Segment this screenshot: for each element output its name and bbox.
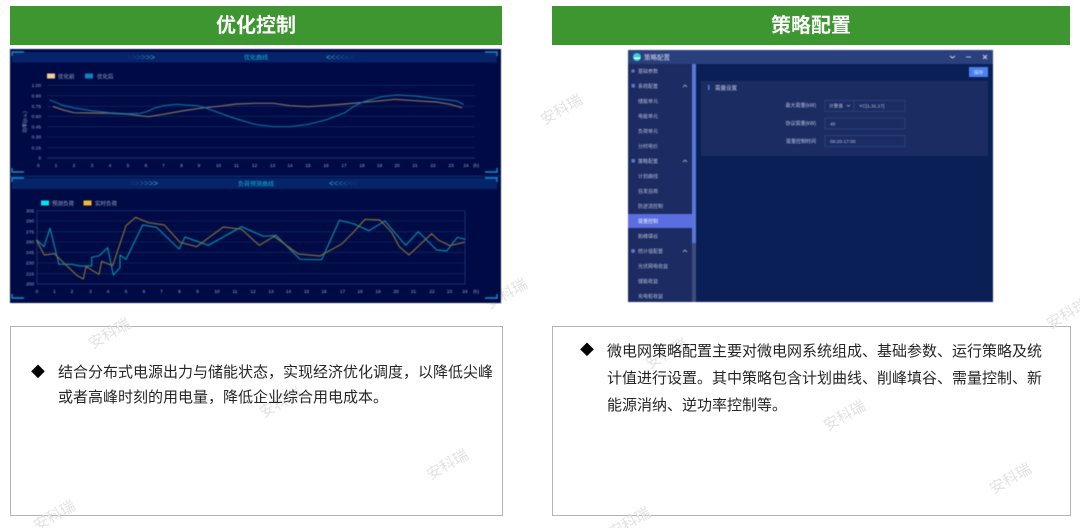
watermarks: 安科瑞 [424, 446, 471, 484]
chart: 负荷预测曲线: 13 [268, 289, 274, 295]
watermarks: 安科瑞 [86, 315, 133, 353]
sidebar menu: 充电桩收益 [638, 293, 663, 300]
chart: 负荷预测曲线: 23 [447, 289, 452, 295]
demand settings form: 协议需量(kW) [785, 120, 816, 127]
chart: 优化曲线: 优化前 [58, 72, 75, 80]
chart: 负荷预测曲线: 1 [53, 289, 56, 295]
text block: right description [607, 343, 1042, 414]
heading: 策略配置: 策略配置 [771, 15, 851, 37]
demand settings form: 需量控制时间 [786, 138, 816, 145]
text block: left description: 结合分布式电源出力与储能状态，实现经济优化调度，以降低尖峰 [58, 364, 493, 381]
chart: 负荷预测曲线: 16 [321, 289, 327, 295]
chart: 优化曲线: >>>>>> [127, 53, 155, 62]
demand settings form: 计算值 [829, 102, 843, 110]
chart: 负荷预测曲线: 20 [393, 289, 399, 295]
chart: 优化曲线: 1.00 [32, 83, 41, 89]
chart: 负荷预测曲线: 7 [160, 289, 163, 295]
text block: right description: 能源消纳、逆功率控制等。 [607, 397, 787, 414]
chart: 优化曲线: 18 [359, 163, 365, 169]
chart: 优化曲线: 0.15 [32, 145, 41, 151]
chart: 负荷预测曲线: (h) [473, 289, 479, 295]
bullet icon: right: ◆ [580, 342, 594, 358]
sidebar menu: 策略配置 [638, 158, 658, 165]
demand settings form: 40 [830, 122, 836, 128]
chart: 优化曲线: 22 [430, 163, 436, 169]
sidebar menu: 储能单元 [638, 98, 658, 105]
chart: 负荷预测曲线: 15 [304, 289, 309, 295]
chart: 优化曲线: 0.90 [32, 93, 41, 99]
save button [969, 67, 988, 77]
panel: left description box [10, 326, 503, 516]
chart: 优化曲线: 0.75 [32, 104, 41, 110]
title bar: 策略配置 [644, 52, 670, 62]
bullet icon: left: ◆ [31, 364, 45, 380]
chart: 优化曲线: 0.60 [32, 114, 41, 120]
sidebar menu: 防逆流控制 [638, 203, 663, 210]
title bar [628, 50, 993, 64]
chart: 优化曲线: 14 [287, 163, 293, 169]
chart: 负荷预测曲线: 215 [26, 271, 34, 277]
chart: 负荷预测曲线: 17 [340, 289, 345, 295]
chart: 优化曲线: 16 [323, 163, 329, 169]
chart: 优化曲线: 10 [216, 163, 221, 169]
chart: 优化曲线: 优化后 [97, 72, 114, 80]
watermarks: 安科瑞 [821, 397, 868, 435]
chart: 优化曲线: 20 [394, 163, 400, 169]
chart: 负荷预测曲线: 275 [26, 229, 34, 235]
watermarks: 安科瑞 [483, 275, 530, 313]
sidebar menu: 削峰填谷 [638, 233, 658, 240]
text block: right description: 计值进行设置。其中策略包含计划曲线、削峰填谷、需量控制、新 [607, 370, 1042, 387]
chart: 优化曲线: 4 [109, 163, 112, 169]
chart: 优化曲线: <<<<<< [326, 53, 354, 62]
chart: 负荷预测曲线: 24 [462, 289, 468, 295]
chart: 优化曲线: 12 [252, 163, 257, 169]
chart: 负荷预测曲线 [12, 178, 497, 298]
sidebar menu: 系统配置 [638, 83, 658, 90]
sidebar menu: 统计值配置 [638, 248, 663, 255]
chart: 优化曲线: 5 [127, 163, 130, 169]
chart: 优化曲线: 7 [162, 163, 165, 169]
chart: 优化曲线: 15 [305, 163, 311, 169]
save button: 保存 [974, 69, 983, 76]
chart: 负荷预测曲线: 9 [196, 289, 199, 295]
chart: 负荷预测曲线: 18 [357, 289, 363, 295]
chart: 优化曲线: 17 [341, 163, 347, 169]
heading: 策略配置 [552, 6, 1070, 45]
chart: 负荷预测曲线: 245 [26, 250, 34, 256]
panel: right description box [552, 326, 1071, 516]
sidebar menu: 储能收益 [638, 278, 658, 285]
chart: 优化曲线: 1 [55, 163, 58, 169]
chart: 负荷预测曲线: 预测负荷 [52, 200, 75, 208]
sidebar menu: 光伏网电收益 [638, 263, 668, 270]
watermarks: 安科瑞 [987, 460, 1034, 498]
chart: 负荷预测曲线: 22 [429, 289, 435, 295]
sidebar menu: 自发自用 [638, 188, 658, 195]
chart: 负荷预测曲线: 290 [26, 219, 34, 225]
demand settings form: 需量设置 [715, 84, 738, 92]
text block: left description: 或者高峰时刻的用电量，降低企业综合用电成本。 [58, 389, 388, 406]
chart: 优化曲线: 24 [463, 163, 469, 169]
chart: 负荷预测曲线: 11 [233, 289, 238, 295]
chart: 负荷预测曲线: 4 [107, 289, 110, 295]
sidebar menu: 分时电价 [638, 143, 658, 150]
chart: 负荷预测曲线: 10 [214, 289, 220, 295]
sidebar menu: 需量控制 [638, 218, 658, 225]
chart: 负荷预测曲线: 实时负荷 [95, 200, 118, 208]
chart: 负荷预测曲线: 12 [250, 289, 256, 295]
chart: 负荷预测曲线: 200 [26, 282, 34, 288]
chart: 优化曲线: 0 [37, 163, 40, 169]
chart: 优化曲线: 2 [73, 163, 76, 169]
chart: 负荷预测曲线: 3 [89, 289, 92, 295]
chart: 负荷预测曲线: 305 [26, 208, 34, 214]
watermarks: 安科瑞 [538, 91, 585, 129]
watermarks: 安科瑞 [643, 335, 690, 373]
chart: 优化曲线: 9 [198, 163, 201, 169]
chart: 优化曲线: 21 [412, 163, 418, 169]
chart: 优化曲线: 0.45 [32, 124, 41, 130]
sidebar menu: 负荷单元 [638, 128, 658, 135]
heading: 优化控制 [10, 6, 502, 45]
sidebar menu [628, 64, 696, 302]
sidebar menu: 计划曲线 [638, 173, 658, 180]
chart: 负荷预测曲线: 230 [26, 261, 34, 267]
chart: 优化曲线: 8 [180, 163, 183, 169]
chart: 优化曲线: 3 [91, 163, 94, 169]
watermarks: 安科瑞 [257, 384, 304, 422]
chart: 优化曲线: 0 [38, 156, 41, 162]
chart: 负荷预测曲线: 260 [26, 240, 34, 246]
chart: 优化曲线: 19 [377, 163, 382, 169]
chart: 优化曲线: 功率(p.u.) [22, 111, 28, 133]
text block: right description: 微电网策略配置主要对微电网系统组成、基础参数、运行策略及统 [607, 343, 1042, 360]
chart: 优化曲线 [12, 52, 497, 172]
chart: 优化曲线: 13 [270, 163, 275, 169]
chart: 负荷预测曲线: 0 [36, 289, 39, 295]
chart: 负荷预测曲线: 8 [178, 289, 181, 295]
sidebar menu: 电能单元 [638, 113, 658, 120]
chart: 负荷预测曲线: 2 [71, 289, 74, 295]
demand settings form: 最大需量(kW) [785, 102, 816, 109]
chart: 优化曲线: 6 [145, 163, 148, 169]
chart: 负荷预测曲线: 19 [375, 289, 381, 295]
chart: 负荷预测曲线: 6 [143, 289, 146, 295]
demand settings form [701, 81, 988, 156]
chart: 负荷预测曲线: 21 [411, 289, 416, 295]
heading: 优化控制: 优化控制 [216, 15, 296, 37]
chart: 负荷预测曲线: >>>>>> [130, 179, 158, 188]
chart: 负荷预测曲线: 14 [286, 289, 291, 295]
chart: 优化曲线: 23 [448, 163, 454, 169]
chart: 负荷预测曲线: 负荷预测曲线 [238, 180, 274, 188]
chart: 优化曲线: (h) [473, 163, 479, 169]
chart: 负荷预测曲线: <<<<<< [329, 179, 357, 188]
demand settings form: YC[1,31,17] [859, 104, 884, 110]
chart: 负荷预测曲线: 5 [125, 289, 128, 295]
demand settings form: 09:20-17:00 [830, 139, 856, 145]
sidebar menu: 基础参数 [638, 68, 658, 75]
text block: left description [58, 364, 493, 406]
chart: 优化曲线: 0.30 [32, 135, 41, 141]
chart: 优化曲线: 11 [234, 163, 239, 169]
chart: 优化曲线: 优化曲线 [244, 54, 268, 62]
